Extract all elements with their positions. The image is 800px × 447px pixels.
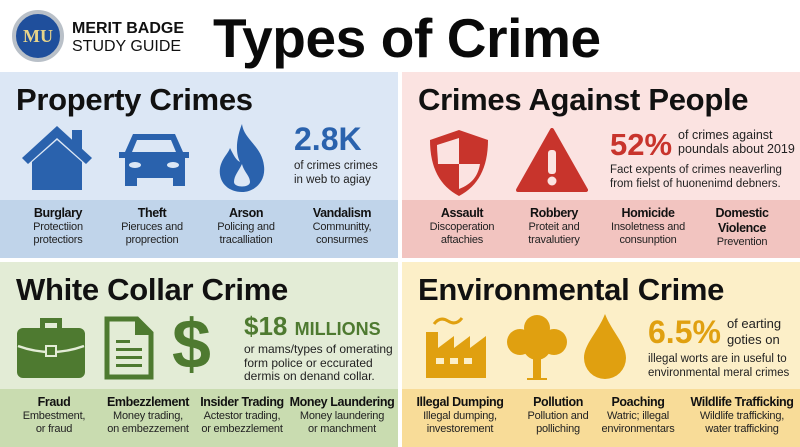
stat: goties on xyxy=(727,332,780,347)
panel: environmental crime: Environmental Crime xyxy=(418,272,724,307)
icon: tree xyxy=(507,315,567,380)
panel: white collar crime: White Collar Crime xyxy=(16,272,288,307)
item: domestic violence: Domestic xyxy=(715,206,769,220)
item: embezzlement: on embezzement xyxy=(107,423,189,435)
stat: 2.8K xyxy=(294,121,362,157)
icon: shield xyxy=(430,130,488,196)
panel: environmental crime xyxy=(402,262,800,447)
item: embezzlement: Money trading, xyxy=(113,410,183,422)
stat: 52% xyxy=(610,127,672,162)
item: wildlife trafficking xyxy=(690,395,794,435)
icon: warning xyxy=(516,128,588,192)
item: poaching: Poaching xyxy=(611,395,665,409)
item: pollution: Pollution and xyxy=(527,410,588,422)
item: insider trading: or embezzlement xyxy=(201,423,283,435)
item: vandalism: Communitty, xyxy=(313,221,371,233)
item: wildlife trafficking: water trafficking xyxy=(705,423,779,435)
item: money laundering: Money Laundering xyxy=(290,395,394,409)
item: fraud xyxy=(23,395,85,435)
item: pollution: Pollution xyxy=(533,395,583,409)
stat xyxy=(610,127,795,190)
item: insider trading: Actestor trading, xyxy=(204,410,280,422)
stat: $18 MILLIONS xyxy=(244,311,381,341)
stat xyxy=(244,311,393,383)
panel: crimes against people: Crimes Against People xyxy=(418,82,748,117)
item: embezzlement: Embezzlement xyxy=(107,395,189,409)
panel: property crimes: Property Crimes xyxy=(16,82,253,117)
stat: environmental meral crimes xyxy=(648,367,789,379)
item: embezzlement xyxy=(107,395,190,435)
item: domestic violence: Prevention xyxy=(717,236,767,248)
item: insider trading xyxy=(200,395,284,435)
item: robbery: travalutiery xyxy=(528,234,580,246)
stat: in web to agiay xyxy=(294,174,371,186)
logo text: MERIT BADGE xyxy=(72,20,184,37)
icon: house xyxy=(22,126,92,190)
item: domestic violence xyxy=(715,206,769,248)
strip xyxy=(402,200,800,258)
title: Types of Crime xyxy=(213,7,601,69)
item: vandalism: consurmes xyxy=(316,234,368,246)
item: insider trading: Insider Trading xyxy=(200,395,284,409)
item: robbery: Proteit and xyxy=(528,221,580,233)
icon: document xyxy=(104,316,154,380)
item: money laundering xyxy=(290,395,394,435)
stat: of earting xyxy=(727,316,781,331)
item: illegal dumping: Illegal dumping, xyxy=(423,410,497,422)
stat: poundals about 2019 xyxy=(678,142,795,156)
item: burglary xyxy=(33,206,83,246)
stat: from fielst of huonenimd debners. xyxy=(610,178,781,190)
item: homicide: Insoletness and xyxy=(611,221,685,233)
item: fraud: Embestment, xyxy=(23,410,85,422)
stat: of crimes crimes xyxy=(294,160,378,172)
item: assault: Assault xyxy=(441,206,483,220)
stat: illegal worts are in useful to xyxy=(648,353,787,365)
panel: property crimes xyxy=(0,72,398,258)
item: assault: Discoperation xyxy=(430,221,494,233)
item: homicide xyxy=(611,206,685,246)
item: burglary: Protectiion xyxy=(33,221,83,233)
item: money laundering: or manchment xyxy=(308,423,376,435)
item: homicide: Homicide xyxy=(621,206,675,220)
icon: flame xyxy=(220,124,264,192)
item: vandalism xyxy=(313,206,371,246)
item: poaching: environmentars xyxy=(601,423,674,435)
stat: of crimes against xyxy=(678,128,773,142)
item: theft: Pieruces and xyxy=(121,221,183,233)
item: homicide: consunption xyxy=(619,234,677,246)
stat: Fact expents of crimes neaverling xyxy=(610,164,782,176)
item: poaching xyxy=(601,395,674,435)
strip xyxy=(402,389,800,447)
logo text: STUDY GUIDE xyxy=(72,38,181,55)
item: theft: proprection xyxy=(126,234,178,246)
item: pollution xyxy=(527,395,588,435)
item: arson: Policing and xyxy=(217,221,275,233)
logo xyxy=(12,10,184,62)
item: illegal dumping: Illegal Dumping xyxy=(416,395,504,409)
logo text xyxy=(72,20,184,55)
item: vandalism: Vandalism xyxy=(313,206,371,220)
stat: form police or eccurated xyxy=(244,356,373,370)
item: pollution: polliching xyxy=(536,423,580,435)
item: theft: Theft xyxy=(138,206,166,220)
item: arson xyxy=(217,206,275,246)
icon: dollar: $ xyxy=(172,305,211,383)
strip xyxy=(0,389,398,447)
item: fraud: Fraud xyxy=(38,395,70,409)
icon: briefcase xyxy=(17,318,85,378)
item: theft xyxy=(121,206,183,246)
item: burglary: protectiors xyxy=(33,234,83,246)
icon: factory xyxy=(426,317,486,378)
icon: car xyxy=(119,134,189,186)
item: arson: tracalliation xyxy=(219,234,273,246)
icon: MU badge xyxy=(12,10,64,62)
item: wildlife trafficking: Wildlife Trafficking xyxy=(690,395,794,409)
item: assault: aftachies xyxy=(441,234,483,246)
panel: crimes against people xyxy=(402,72,800,258)
panel: white collar crime xyxy=(0,262,398,447)
item: assault xyxy=(430,206,494,246)
stat: 6.5% xyxy=(648,314,721,350)
icon: drop xyxy=(584,314,626,379)
strip xyxy=(0,200,398,258)
item: robbery: Robbery xyxy=(530,206,578,220)
icon: MU badge: MU xyxy=(23,26,53,46)
item: fraud: or fraud xyxy=(36,423,72,435)
item: burglary: Burglary xyxy=(34,206,82,220)
item: illegal dumping xyxy=(416,395,504,435)
stat xyxy=(294,121,378,186)
stat: dermis on denand collar. xyxy=(244,369,375,383)
stat xyxy=(648,314,789,379)
item: illegal dumping: investorement xyxy=(427,423,493,435)
item: robbery xyxy=(528,206,580,246)
item: poaching: Watric; illegal xyxy=(607,410,669,422)
stat: or mams/types of omerating xyxy=(244,342,393,356)
item: wildlife trafficking: Wildlife trafficking, xyxy=(700,410,784,422)
item: arson: Arson xyxy=(229,206,263,220)
item: domestic violence: Violence xyxy=(718,221,766,235)
item: money laundering: Money laundering xyxy=(300,410,384,422)
